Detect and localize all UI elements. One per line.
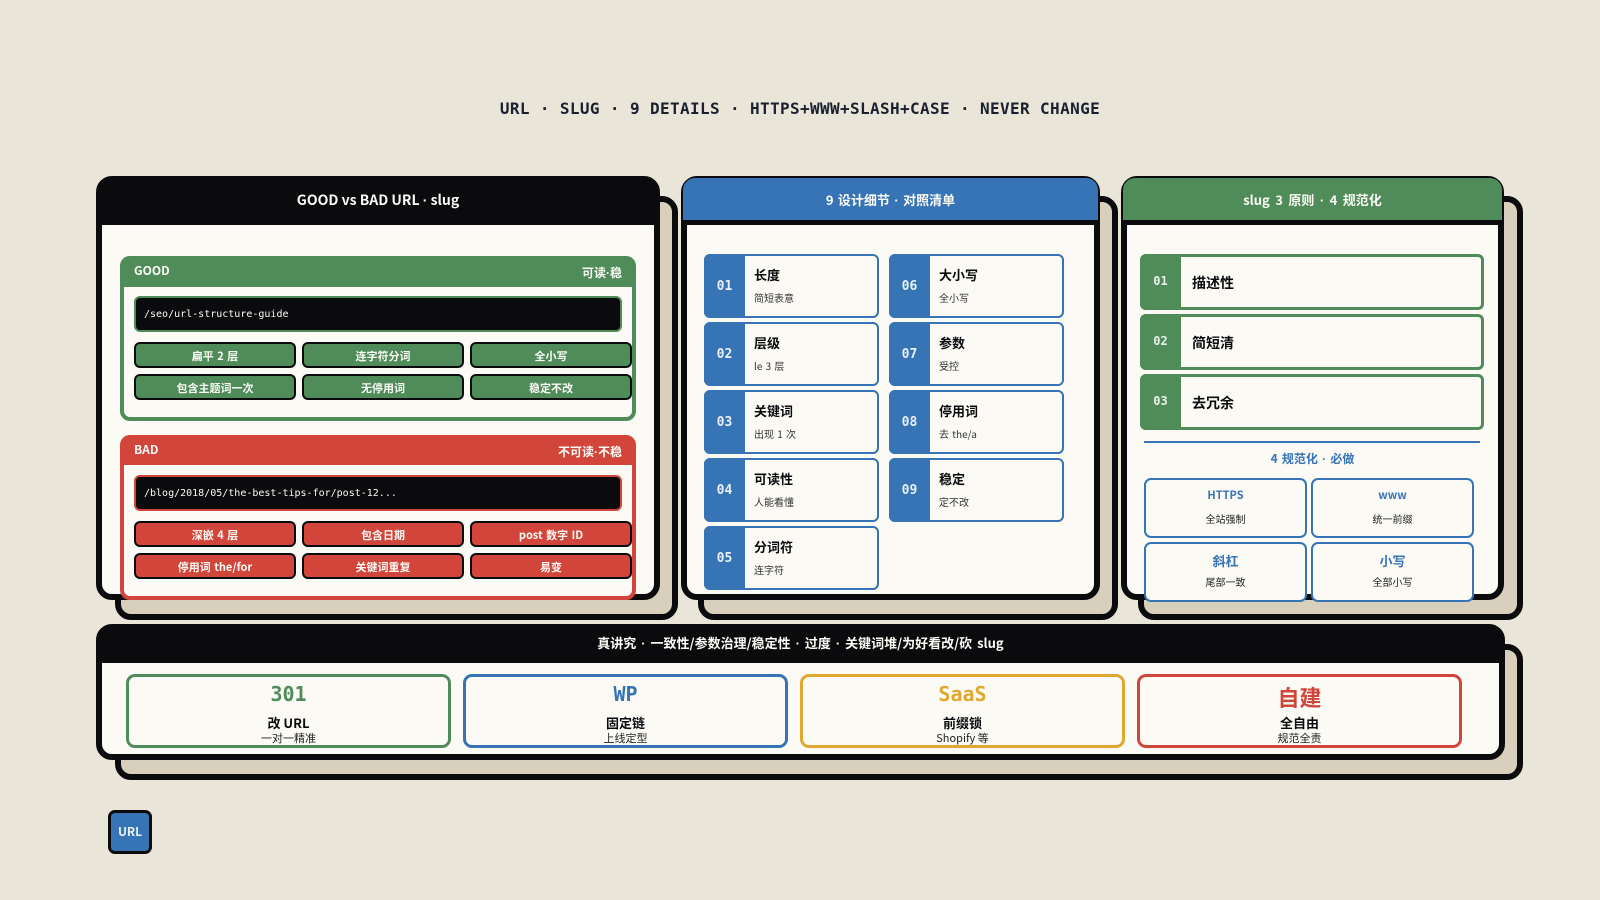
heading: good vs bad: GOOD vs BAD URL · slug (297, 190, 459, 210)
heading: bottom caution: 真讲究 · 一致性/参数治理/稳定性 · 过度 · 关键词堆/为好看改/砍 slug (597, 633, 1004, 652)
good traits chips: 全小写 (534, 348, 568, 364)
title: URL · SLUG · 9 DETAILS · HTTPS+WWW+SLASH+CASE · NEVER CHANGE (500, 99, 1100, 118)
card WP: WP (613, 682, 638, 706)
item 02: le 3 层 (754, 358, 784, 373)
bad header: BAD (134, 441, 158, 458)
item 06: 06 (902, 279, 917, 294)
bad header (123, 438, 633, 465)
item 05: 分词符 (754, 537, 793, 556)
card www (1311, 478, 1474, 538)
card HTTPS: 全站强制 (1206, 511, 1246, 526)
item 03 (704, 390, 879, 454)
item 01 (704, 254, 879, 318)
bad traits chips (134, 521, 632, 579)
item 09: 稳定 (939, 469, 965, 488)
principle 01: 01 (1153, 274, 1168, 288)
card WP: 上线定型 (604, 730, 648, 746)
card www: www (1378, 487, 1407, 503)
bad block (120, 435, 636, 600)
bad traits chips: 关键词重复 (356, 559, 410, 575)
item 05 (704, 526, 879, 590)
principle 02: 02 (1153, 334, 1168, 348)
item 08: 08 (902, 415, 917, 430)
item 01: 简短表意 (754, 290, 794, 305)
card lowercase: 小写 (1379, 551, 1406, 570)
good header (123, 259, 633, 287)
item 03: 关键词 (754, 401, 793, 420)
item 03: 出现 1 次 (754, 426, 796, 441)
good block (120, 256, 636, 421)
item 02: 层级 (754, 333, 780, 352)
item 05: 05 (717, 551, 732, 566)
card www: 统一前缀 (1372, 511, 1412, 526)
item 08 (889, 390, 1064, 454)
card self-built: 规范全责 (1278, 730, 1322, 746)
card WP (463, 674, 788, 748)
good traits chips: 连字符分词 (356, 348, 410, 364)
principle 02 (1140, 314, 1484, 370)
principle 01 (1140, 254, 1484, 310)
item 08: 去 the/a (939, 426, 977, 441)
card HTTPS (1144, 478, 1307, 538)
good header: 可读·稳 (582, 264, 622, 281)
card 301 (126, 674, 451, 748)
good traits chips (134, 342, 632, 400)
bad traits chips: 深嵌 4 层 (192, 527, 238, 543)
principle 03: 03 (1153, 394, 1168, 408)
bad traits chips: 停用词 the/for (178, 559, 252, 575)
principle 01: 描述性 (1192, 273, 1234, 293)
card self-built: 自建 (1277, 681, 1322, 713)
badge: URL (108, 810, 152, 854)
card lowercase (1311, 542, 1474, 602)
card 301: 301 (270, 682, 307, 706)
item 04: 人能看懂 (754, 494, 794, 509)
item 04: 04 (717, 483, 732, 498)
card slash: 斜杠 (1212, 551, 1238, 570)
item 07: 参数 (939, 333, 965, 352)
card slash (1144, 542, 1307, 602)
card slash: 尾部一致 (1206, 574, 1246, 589)
bad header: 不可读·不稳 (558, 443, 622, 460)
heading: slug principles: slug 3 原则 · 4 规范化 (1243, 190, 1382, 209)
card SaaS (800, 674, 1125, 748)
good header: GOOD (134, 262, 170, 279)
panel: 9 design details (681, 176, 1118, 620)
item 09: 定不改 (939, 494, 969, 509)
panel: good vs bad URL (96, 176, 678, 620)
item 04 (704, 458, 879, 522)
bad traits chips: post 数字 ID (519, 527, 583, 543)
good traits chips: 稳定不改 (529, 380, 573, 396)
badge: URL: URL (118, 823, 142, 840)
bad traits chips: 易变 (540, 559, 562, 575)
card WP: 固定链 (606, 713, 645, 732)
item 05: 连字符 (754, 562, 784, 577)
item 07: 07 (902, 347, 917, 362)
item 06 (889, 254, 1064, 318)
item 08: 停用词 (939, 401, 978, 420)
card HTTPS: HTTPS (1207, 487, 1244, 503)
item 03: 03 (717, 415, 732, 430)
principle 03 (1140, 374, 1484, 430)
item 02 (704, 322, 879, 386)
item 07 (889, 322, 1064, 386)
checklist grid (704, 254, 1064, 590)
item 09 (889, 458, 1064, 522)
heading: 9 details: 9 设计细节 · 对照清单 (826, 190, 955, 209)
card 301: 一对一精准 (261, 730, 316, 746)
card SaaS: SaaS (938, 682, 987, 706)
card self-built: 全自由 (1280, 713, 1319, 732)
card self-built (1137, 674, 1462, 748)
bad traits chips: 包含日期 (361, 527, 405, 543)
item 01: 01 (717, 279, 732, 294)
card lowercase: 全部小写 (1372, 574, 1412, 589)
item 02: 02 (717, 347, 732, 362)
principle 03: 去冗余 (1192, 393, 1234, 413)
good traits chips: 包含主题词一次 (176, 380, 254, 396)
card SaaS: Shopify 等 (936, 730, 989, 746)
card SaaS: 前缀锁 (943, 713, 982, 732)
good traits chips: 无停用词 (361, 380, 405, 396)
item 01: 长度 (754, 265, 780, 284)
good URL example: /seo/url-structure-guide (144, 309, 288, 320)
bad URL example: /blog/2018/05/the-best-tips-for/post-12... (144, 488, 397, 499)
item 04: 可读性 (754, 469, 793, 488)
principle 02: 简短清 (1192, 333, 1234, 353)
bad URL example (134, 475, 622, 511)
subheading: 4 canonicalization: 4 规范化 · 必做 (1271, 450, 1354, 467)
good URL example (134, 296, 622, 332)
item 06: 大小写 (939, 265, 978, 284)
panel: slug principles and canonicalization (1121, 176, 1523, 620)
good traits chips: 扁平 2 层 (192, 348, 238, 364)
card 301: 改 URL (267, 713, 310, 732)
panel: bottom platforms (96, 624, 1523, 780)
item 06: 全小写 (939, 290, 969, 305)
item 07: 受控 (939, 358, 959, 373)
item 09: 09 (902, 483, 917, 498)
